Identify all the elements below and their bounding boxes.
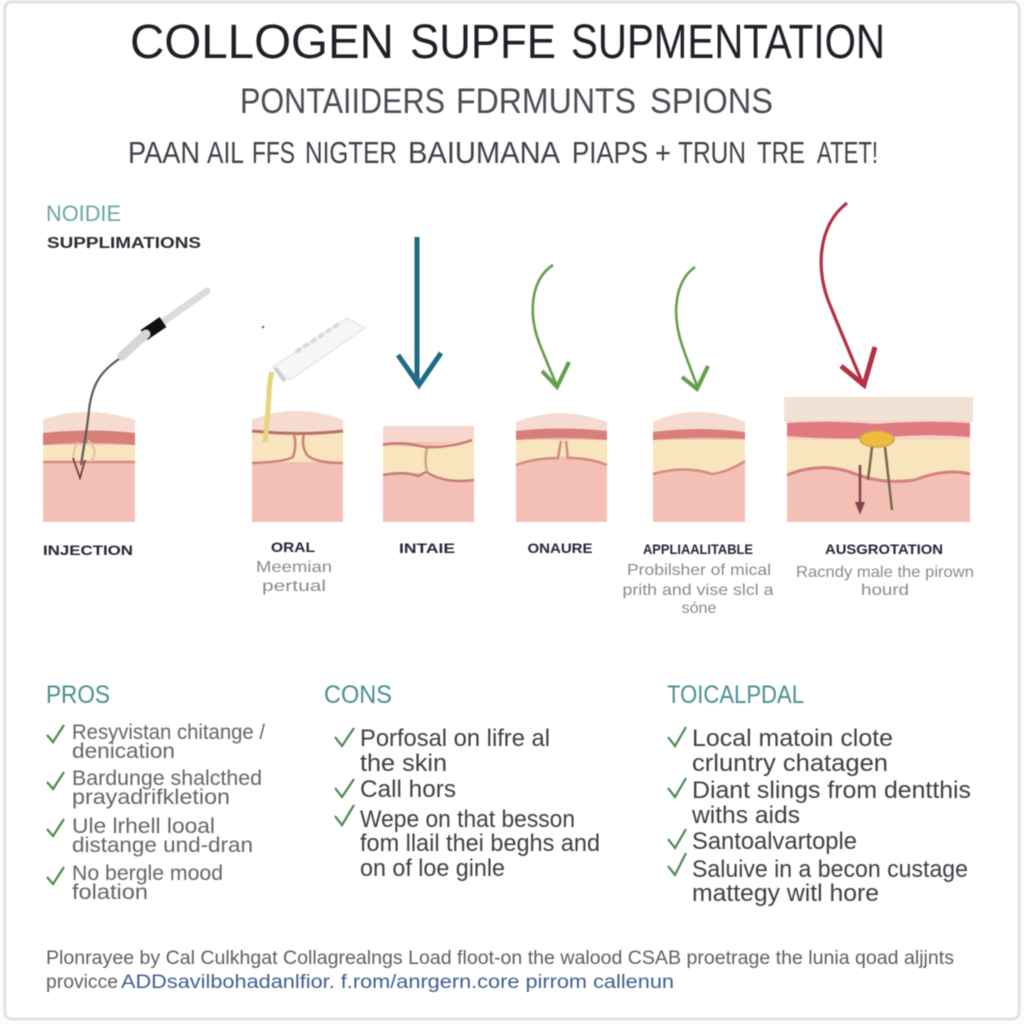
method: absorption [784, 203, 974, 599]
footer note [46, 948, 954, 993]
arrow: red [821, 203, 875, 385]
list: withs aids [691, 802, 800, 829]
tagline: PIAPS [572, 135, 648, 170]
description: hourd [861, 582, 909, 599]
subtitle: FDRMUNTS [456, 82, 636, 121]
description: prith and vise slcl a [622, 582, 774, 599]
skin cross-section [516, 414, 607, 522]
method: injection [43, 291, 207, 558]
title: SUPFE [410, 16, 556, 69]
tagline: BAIUMANA [408, 135, 560, 170]
list: mattegy witl hore [692, 880, 879, 907]
description: pertual [262, 578, 326, 595]
skin cross-section [252, 411, 343, 522]
list: the skin [360, 750, 447, 777]
label: INTAIE [399, 540, 455, 556]
footer note: ADDsavilbohadanlfior. f.rom/anrgern.core pirrom callenun [121, 972, 674, 993]
title: SUPMENTATION [571, 16, 885, 69]
tagline: TRUN [678, 135, 746, 170]
footer note: Plonrayee by Cal Culkhgat Collagrealngs Load floot-on the walood CSAB proetrage the lunia qoad aljjnts [46, 948, 954, 969]
list: Wepe on that besson [360, 806, 575, 833]
skin cross-section [383, 426, 474, 522]
method: online [516, 265, 607, 556]
method: intake [383, 237, 474, 556]
description: Meemian [256, 559, 332, 576]
tagline: NIGTER [305, 135, 397, 170]
list: denication [72, 739, 175, 763]
tagline: FFS [252, 135, 295, 170]
method: applicable [622, 267, 774, 617]
list: Bardunge shalcthed [72, 766, 262, 790]
description [796, 564, 974, 599]
label: AUSGROTATION [825, 541, 943, 557]
list: No bergle mood [72, 861, 223, 885]
list: Call hors [360, 776, 456, 803]
arrow: green [533, 265, 569, 387]
yellow deposit [860, 431, 894, 447]
tagline: + [655, 135, 671, 170]
description [622, 562, 774, 617]
tagline: TRE [757, 135, 805, 170]
label: APPLIAALITABLE [643, 541, 753, 557]
list: Santoalvartople [692, 828, 857, 855]
label: ORAL [271, 539, 315, 555]
panel: cons [324, 681, 600, 882]
list [47, 720, 265, 904]
subtitle: PONTAIIDERS [240, 82, 445, 121]
subtitle [240, 82, 773, 121]
list: prayadrifkletion [72, 785, 230, 809]
footer note: provicce [46, 972, 118, 993]
list: Resyvistan chitange / [72, 720, 265, 744]
arrow: green [676, 267, 708, 389]
section label: SUPPLIMATIONS [47, 235, 201, 252]
description: Racndy male the pirown [796, 564, 974, 581]
label: ONAURE [528, 540, 592, 556]
skin cross-section [653, 412, 745, 522]
icon: syringe [81, 291, 207, 465]
heading: TOICALPDAL [667, 681, 804, 709]
list: distange und-dran [72, 833, 253, 857]
heading: PROS [46, 681, 110, 709]
list: on of loe ginle [360, 855, 505, 882]
list: fom llail thei beghs and [360, 830, 600, 857]
tagline: AIL [207, 135, 244, 170]
subtitle: SPIONS [650, 82, 773, 121]
label: INJECTION [43, 542, 133, 558]
list: Porfosal on lifre al [360, 725, 550, 752]
heading: CONS [324, 681, 392, 709]
list: Diant slings from dentthis [692, 777, 971, 804]
list: Local matoin clote [692, 725, 893, 752]
description: Probilsher of mical [627, 562, 771, 579]
skin cross-section [784, 397, 973, 522]
tagline [128, 135, 878, 170]
section label: NOIDIE [46, 201, 121, 226]
list: crluntry chatagen [692, 750, 888, 777]
description [256, 559, 332, 595]
list: folation [72, 880, 148, 904]
panel: topical [667, 681, 971, 907]
panel: pros [46, 681, 265, 904]
icon: tube [262, 318, 365, 442]
tagline: PAAN [128, 135, 200, 170]
section label [46, 201, 201, 252]
title: COLLOGEN [130, 16, 394, 69]
method: oral [252, 318, 365, 595]
list: Ule lrhell looal [72, 814, 215, 838]
list: Saluive in a becon custage [692, 856, 968, 883]
arrow: teal [398, 237, 441, 385]
list [335, 725, 600, 882]
description: sóne [682, 600, 717, 617]
title [130, 16, 885, 69]
skin cross-section [43, 412, 135, 522]
list [668, 725, 971, 907]
tagline: ATET! [817, 135, 878, 170]
